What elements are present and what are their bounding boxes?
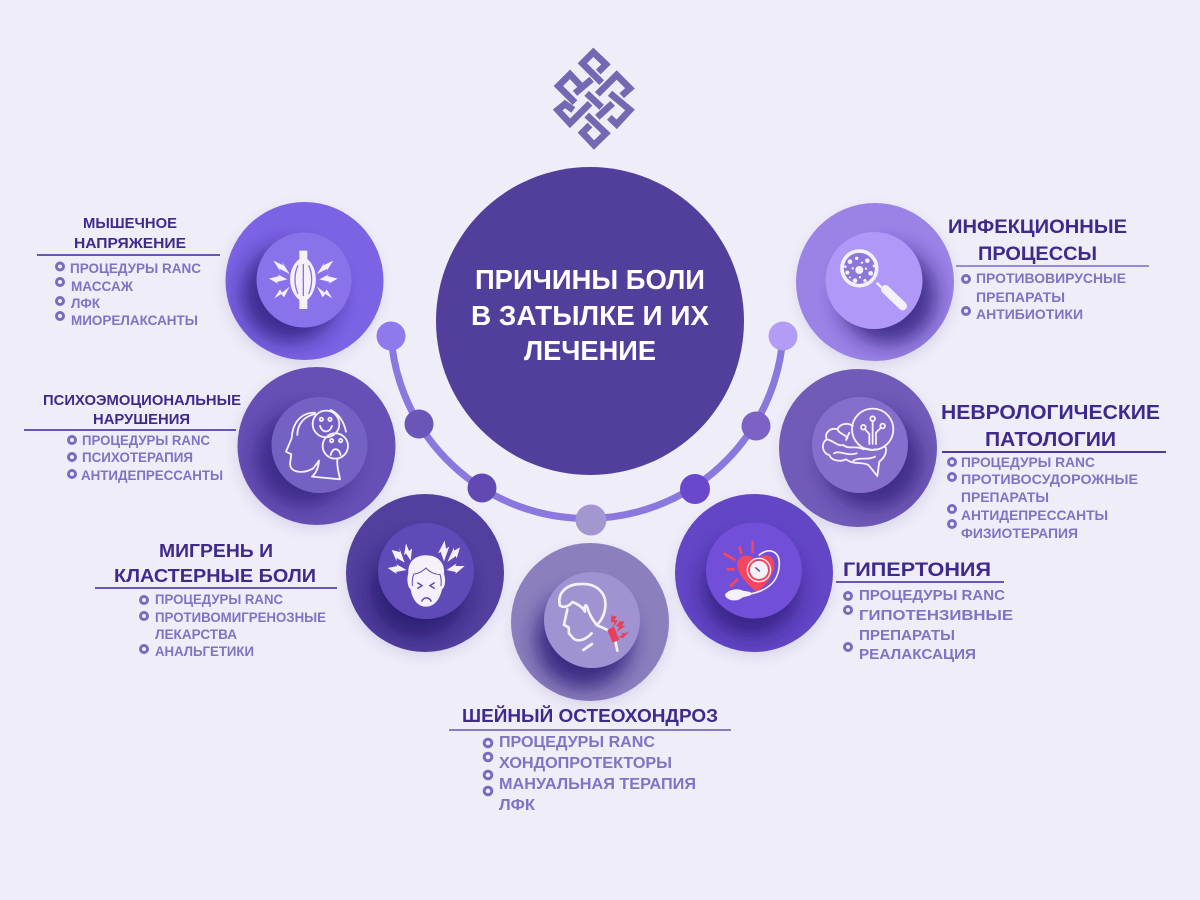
treatment list: [948, 454, 1138, 541]
panel: psycho-emotional disorders: [24, 367, 396, 529]
panel: neurological pathologies: [779, 369, 1166, 541]
title: ЛЕЧЕНИЕ: [524, 335, 656, 366]
treatment list: ПРЕПАРАТЫ: [961, 489, 1049, 505]
central connecting arc with nodes: [376, 322, 798, 536]
circle badge: migraine: [346, 494, 504, 656]
treatment list: МИОРЕЛАКСАНТЫ: [71, 313, 198, 328]
panel: infectious processes: [796, 203, 1149, 365]
panel: hypertension: [675, 494, 1013, 663]
treatment list: АНТИБИОТИКИ: [976, 306, 1083, 322]
treatment list: ПРОЦЕДУРЫ RANC: [859, 588, 1006, 604]
title: [471, 264, 709, 366]
treatment list: [68, 433, 223, 483]
treatment list: ЛФК: [499, 797, 535, 814]
heading: [114, 541, 316, 586]
treatment list: РЕАЛАКСАЦИЯ: [859, 647, 976, 663]
circle badge: magnifier: [796, 203, 954, 365]
icon: head: [286, 410, 348, 479]
panel: muscle tension: [37, 202, 384, 364]
treatment list: АНАЛЬГЕТИКИ: [155, 644, 254, 659]
heading: ГИПЕРТОНИЯ: [843, 559, 991, 581]
treatment list: ГИПОТЕНЗИВНЫЕ: [859, 608, 1013, 624]
central circle with title: [436, 167, 744, 475]
treatment list: АНТИДЕПРЕССАНТЫ: [81, 468, 223, 483]
heading: НАПРЯЖЕНИЕ: [74, 235, 186, 252]
heading: КЛАСТЕРНЫЕ БОЛИ: [114, 566, 316, 586]
heading: ПАТОЛОГИИ: [985, 429, 1116, 451]
heading: [74, 215, 186, 252]
heading: НЕВРОЛОГИЧЕСКИЕ: [941, 402, 1160, 424]
treatment list: ПРОТИВОМИГРЕНОЗНЫЕ: [155, 610, 326, 625]
treatment list: ХОНДОПРОТЕКТОРЫ: [499, 755, 672, 772]
treatment list: ЛФК: [71, 296, 101, 311]
treatment list: ПРОТИВОВИРУСНЫЕ: [976, 270, 1126, 286]
circle badge: neck: [511, 543, 669, 705]
icon: brain with circuit: [823, 409, 893, 476]
treatment list: [844, 588, 1013, 663]
treatment list: [484, 734, 696, 814]
heading: [941, 402, 1160, 451]
heading: ПСИХОЭМОЦИОНАЛЬНЫЕ: [43, 392, 241, 409]
icon: muscle with bolts: [269, 251, 338, 309]
treatment list: [962, 270, 1126, 322]
icon: head with lightning: [388, 541, 465, 607]
treatment list: ПРЕПАРАТЫ: [859, 628, 955, 644]
title: ПРИЧИНЫ БОЛИ: [475, 264, 705, 295]
title: В ЗАТЫЛКЕ И ИХ: [471, 300, 709, 331]
icon: magnifier with microbes: [842, 251, 903, 306]
treatment list: ПСИХОТЕРАПИЯ: [82, 450, 193, 465]
heading: ИНФЕКЦИОННЫЕ: [948, 216, 1127, 238]
circle badge: brain: [779, 369, 937, 531]
treatment list: [56, 261, 201, 328]
circle badge: head with moods: [237, 367, 396, 529]
heading: МЫШЕЧНОЕ: [83, 215, 177, 232]
treatment list: ПРОЦЕДУРЫ RANC: [155, 592, 283, 607]
treatment list: [140, 592, 326, 659]
circle badge: heart gauge: [675, 494, 833, 656]
heading: [43, 392, 241, 428]
logo: endless knot: [558, 52, 630, 145]
panel: cervical osteochondrosis: [449, 543, 731, 814]
heading: ШЕЙНЫЙ ОСТЕОХОНДРОЗ: [462, 705, 718, 726]
panel: migraine and cluster pain: [95, 494, 504, 659]
circle badge: muscle: [225, 202, 384, 364]
treatment list: ЛЕКАРСТВА: [155, 627, 237, 642]
treatment list: АНТИДЕПРЕССАНТЫ: [961, 507, 1108, 523]
treatment list: ПРЕПАРАТЫ: [976, 289, 1065, 305]
icon: profile with neck pain: [559, 584, 629, 651]
heading: НАРУШЕНИЯ: [93, 411, 190, 428]
treatment list: ПРОЦЕДУРЫ RANC: [82, 433, 210, 448]
heading: [948, 216, 1127, 265]
treatment list: ПРОЦЕДУРЫ RANC: [499, 734, 655, 751]
treatment list: МАССАЖ: [71, 279, 134, 294]
icon: heart with tonometer: [723, 541, 779, 600]
treatment list: ФИЗИОТЕРАПИЯ: [961, 525, 1078, 541]
treatment list: ПРОЦЕДУРЫ RANC: [961, 454, 1095, 470]
treatment list: ПРОТИВОСУДОРОЖНЫЕ: [961, 471, 1138, 487]
heading: МИГРЕНЬ И: [159, 541, 273, 561]
treatment list: ПРОЦЕДУРЫ RANC: [70, 261, 201, 276]
heading: ПРОЦЕССЫ: [978, 243, 1097, 265]
treatment list: МАНУАЛЬНАЯ ТЕРАПИЯ: [499, 776, 696, 793]
